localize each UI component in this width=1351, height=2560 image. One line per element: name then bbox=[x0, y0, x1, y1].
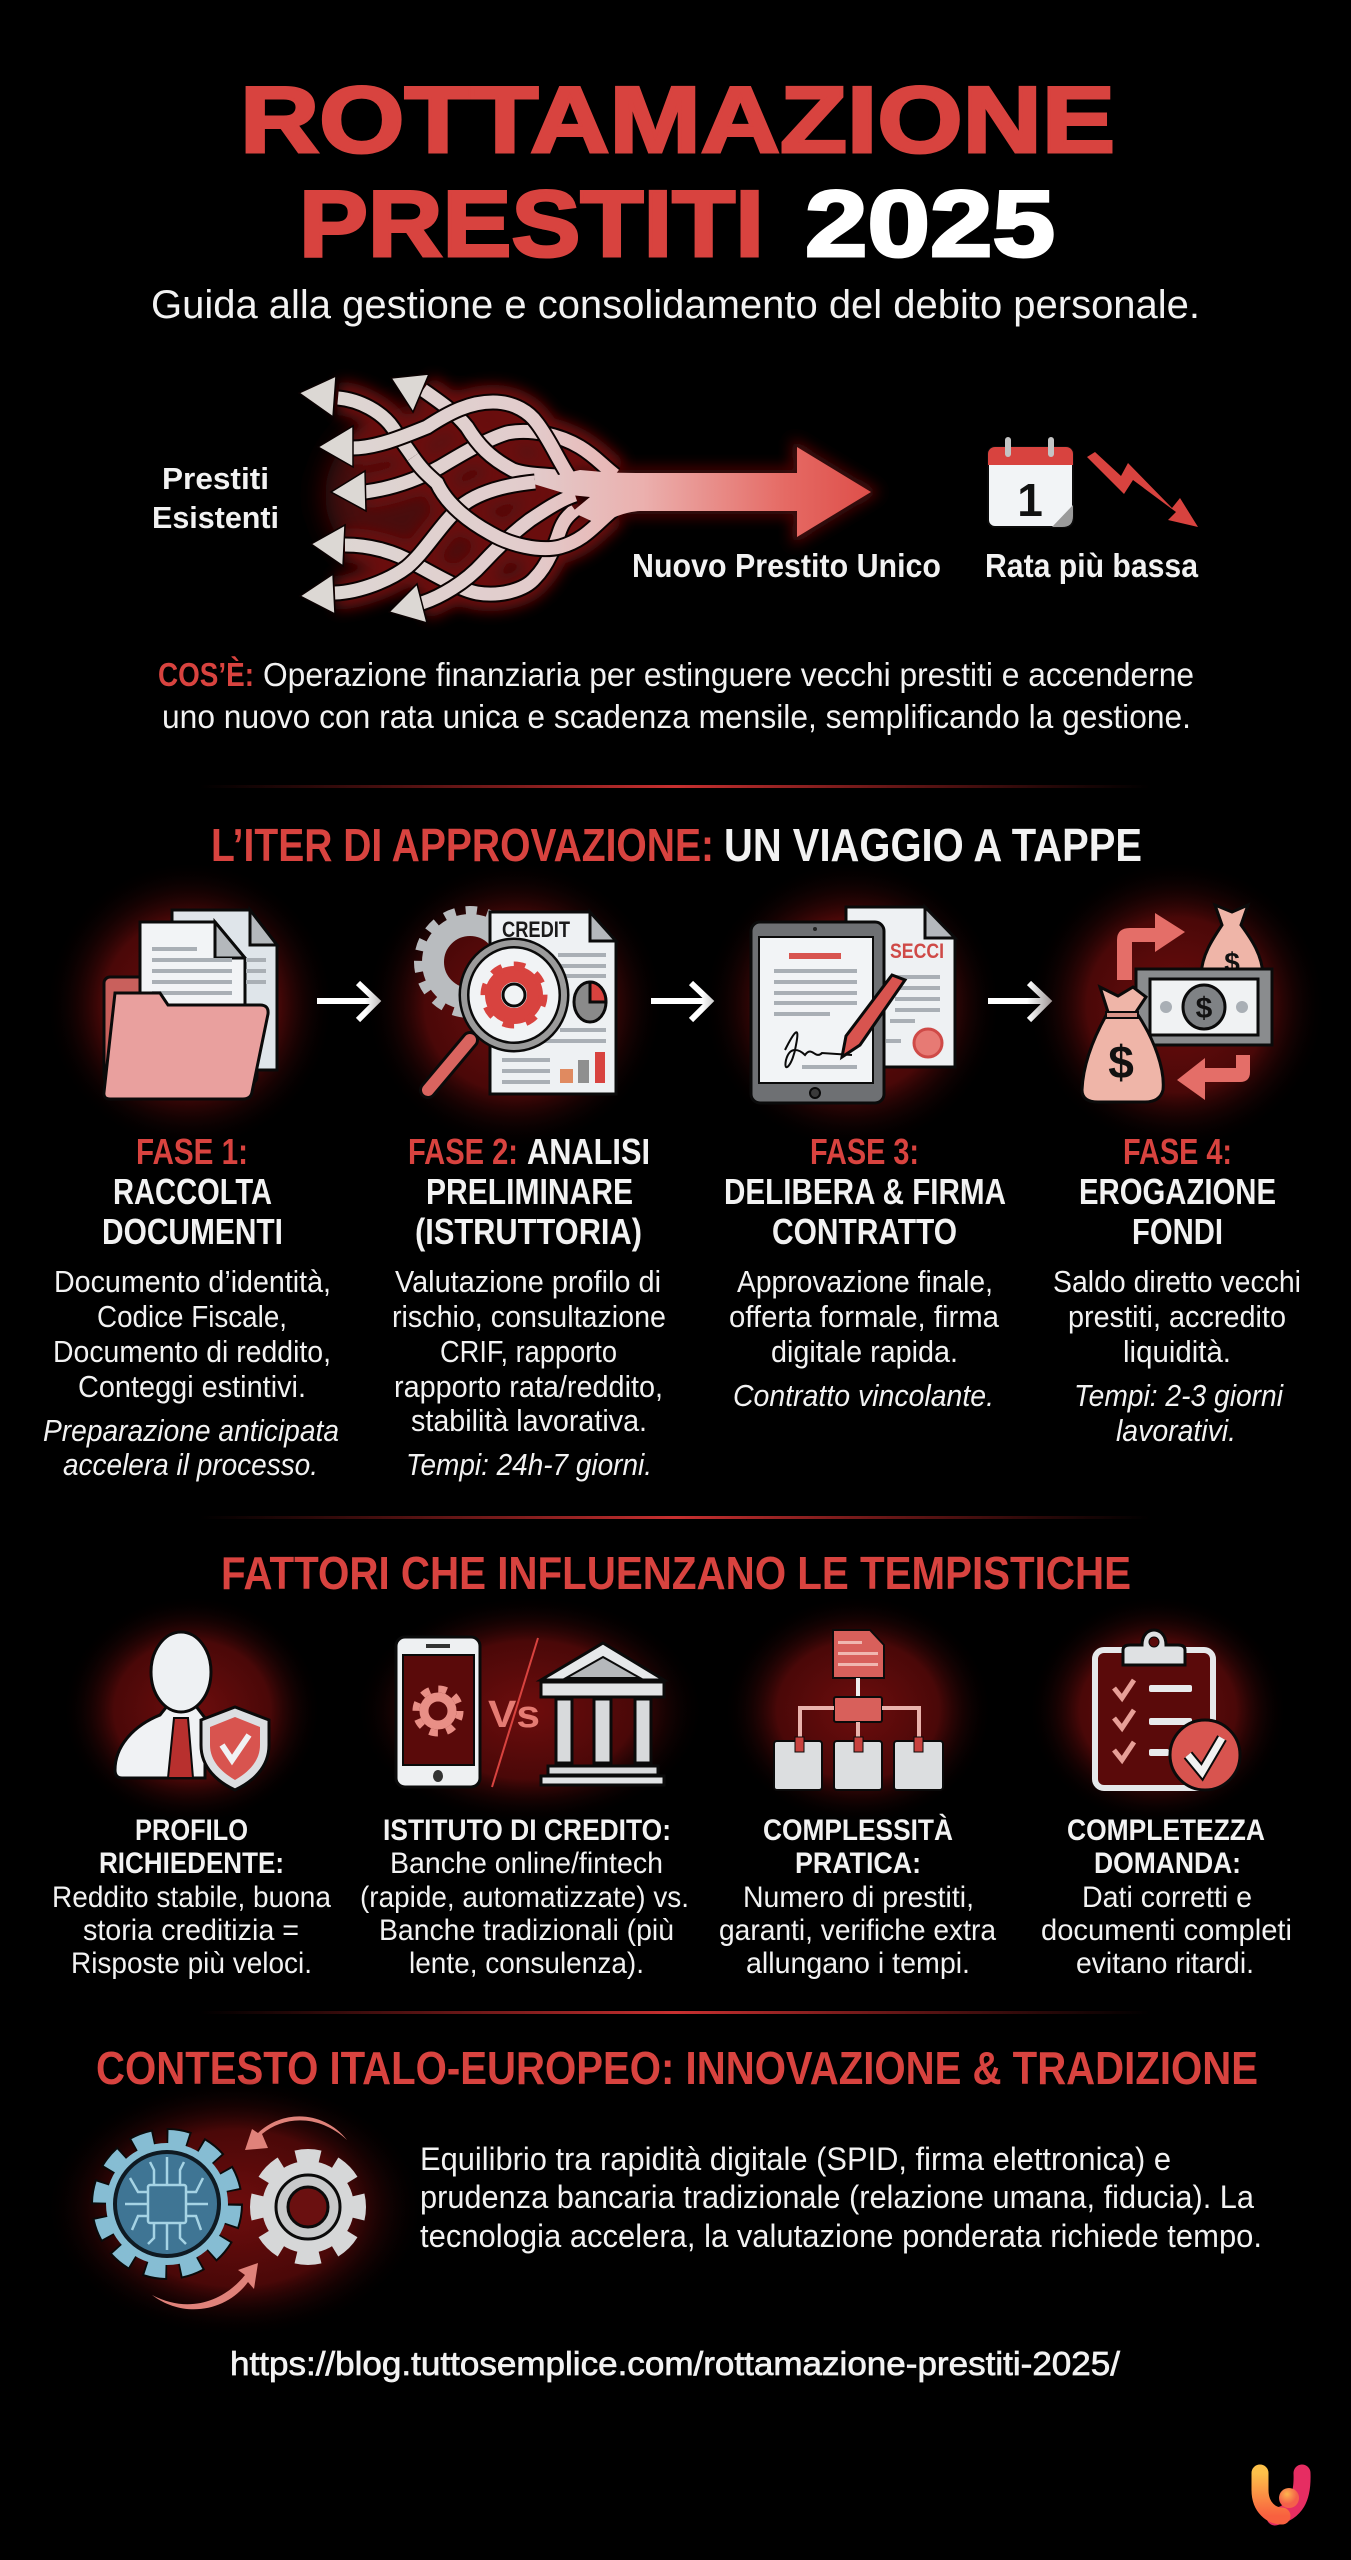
institution title: ISTITUTO DI CREDITO: bbox=[383, 1814, 671, 1847]
profile description: Risposte più veloci. bbox=[71, 1947, 312, 1980]
text block: context description: tecnologia accelera, la valutazione ponderata richiede tempo. bbox=[420, 2218, 1262, 2254]
phase 4 description: Saldo diretto vecchi bbox=[1053, 1264, 1301, 1299]
icon: calendar bbox=[988, 437, 1073, 527]
heading: approval process: L’ITER DI APPROVAZIONE: bbox=[211, 819, 714, 871]
icon: money bags and banknote: $ bbox=[1196, 992, 1213, 1025]
complexity title bbox=[763, 1813, 953, 1880]
text block: definition bbox=[158, 656, 1194, 735]
strand arrowheads bbox=[299, 374, 429, 623]
phase 3 description: offerta formale, firma bbox=[729, 1299, 1000, 1334]
completeness description: Dati corretti e bbox=[1082, 1881, 1252, 1914]
phase 1 title: DOCUMENTI bbox=[102, 1211, 283, 1252]
phase 1 description: Conteggi estintivi. bbox=[78, 1369, 306, 1404]
phase 2 title: FASE 2: bbox=[408, 1131, 518, 1172]
grey gear bbox=[258, 2157, 358, 2257]
phase 1 description: accelera il processo. bbox=[63, 1447, 318, 1482]
icon: digital and traditional gears bbox=[45, 2078, 425, 2338]
profile title: PROFILO bbox=[135, 1814, 248, 1847]
profile title: RICHIEDENTE: bbox=[99, 1847, 284, 1880]
icon: phone versus bank bbox=[355, 1595, 705, 1825]
icon: calendar: 1 bbox=[1017, 474, 1043, 526]
panel: phase 4 bbox=[1027, 860, 1327, 1448]
institution description: Banche tradizionali (più bbox=[379, 1914, 674, 1947]
completeness title: COMPLETEZZA bbox=[1067, 1814, 1265, 1847]
subtitle: Guida alla gestione e consolidamento del debito personale. bbox=[151, 283, 1200, 327]
panel: case complexity bbox=[719, 1595, 996, 1980]
text block: definition: Operazione finanziaria per estinguere vecchi prestiti e accenderne bbox=[263, 656, 1194, 693]
complexity description: allungano i tempi. bbox=[746, 1947, 970, 1980]
completeness title bbox=[1067, 1814, 1265, 1880]
completeness description: documenti completi bbox=[1041, 1914, 1292, 1947]
icon: credit analysis: CREDIT bbox=[502, 917, 570, 942]
icon: tangled loan strands bbox=[335, 390, 615, 603]
complexity description: Numero di prestiti, bbox=[743, 1881, 974, 1914]
complexity description: garanti, verifiche extra bbox=[719, 1914, 996, 1947]
icon: organisation chart bbox=[723, 1595, 993, 1825]
label: lower instalment: Rata più bassa bbox=[985, 547, 1199, 584]
phase 2 description: Valutazione profilo di bbox=[395, 1264, 661, 1299]
phase 2 description: Tempi: 24h-7 giorni. bbox=[406, 1447, 652, 1482]
phase 2 description: CRIF, rapporto bbox=[440, 1334, 617, 1369]
panel: credit institution bbox=[355, 1595, 705, 1980]
title: ROTTAMAZIONE bbox=[240, 67, 1115, 172]
text block: context description: Equilibrio tra rapidità digitale (SPID, firma elettronica) e bbox=[420, 2141, 1171, 2177]
arrow: phase 2 to 3 bbox=[651, 983, 710, 1020]
complexity description bbox=[719, 1881, 996, 1980]
phase 2 description: stabilità lavorativa. bbox=[411, 1403, 647, 1438]
panel: phase 1 bbox=[43, 860, 339, 1482]
icon: clipboard with check bbox=[1028, 1595, 1288, 1825]
phase 1 description: Documento di reddito, bbox=[53, 1334, 331, 1369]
complexity title: PRATICA: bbox=[795, 1847, 921, 1880]
phase 4 description: liquidità. bbox=[1123, 1334, 1231, 1369]
institution description: lente, consulenza). bbox=[409, 1947, 644, 1980]
label: existing loans: Esistenti bbox=[152, 500, 279, 535]
phase 1 title: RACCOLTA bbox=[113, 1171, 272, 1212]
phase 4 description bbox=[1053, 1264, 1301, 1448]
arrow: phase 3 to 4 bbox=[988, 983, 1048, 1020]
source URL: https://blog.tuttosemplice.com/rottamazione-prestiti-2025/ bbox=[230, 2345, 1121, 2382]
rotation arrows bbox=[152, 2116, 347, 2309]
icon: money bags and banknote: $ bbox=[1108, 1036, 1134, 1088]
panel: applicant profile bbox=[52, 1595, 331, 1980]
icon: tablet signature and SECCI document: SECCI bbox=[890, 940, 944, 963]
heading: approval process: UN VIAGGIO A TAPPE bbox=[724, 819, 1142, 871]
phase 2 description: rischio, consultazione bbox=[392, 1299, 666, 1334]
phase 4 title: FONDI bbox=[1132, 1211, 1223, 1252]
phase 4 description: lavorativi. bbox=[1116, 1413, 1236, 1448]
profile description: storia creditizia = bbox=[83, 1914, 299, 1947]
phase 3 title bbox=[724, 1131, 1006, 1252]
institution description: Banche online/fintech bbox=[390, 1847, 663, 1880]
phase 3 description bbox=[729, 1264, 1000, 1413]
arrow: phase 1 to 2 bbox=[317, 983, 377, 1020]
icon: credit analysis bbox=[365, 860, 665, 1150]
phase 1 description: Preparazione anticipata bbox=[43, 1413, 339, 1448]
label: new single loan: Nuovo Prestito Unico bbox=[632, 547, 941, 584]
title bbox=[240, 67, 1115, 276]
blue gear bbox=[101, 2138, 233, 2270]
phase 4 title: EROGAZIONE bbox=[1079, 1171, 1276, 1212]
phase 1 description: Codice Fiscale, bbox=[97, 1299, 287, 1334]
icon: phone versus bank: Vs bbox=[488, 1694, 540, 1736]
title: 2025 bbox=[805, 171, 1055, 276]
heading: timing factors: FATTORI CHE INFLUENZANO LE TEMPISTICHE bbox=[221, 1547, 1131, 1599]
institution description: (rapide, automatizzate) vs. bbox=[360, 1881, 689, 1914]
icon: tablet signature and SECCI document bbox=[702, 860, 1002, 1150]
title: PRESTITI bbox=[299, 171, 764, 276]
icon: person with shield bbox=[62, 1595, 322, 1825]
institution description bbox=[360, 1847, 689, 1980]
heading: approval process bbox=[211, 819, 1142, 871]
phase 4 description: Tempi: 2-3 giorni bbox=[1074, 1378, 1284, 1413]
icon: folder with documents bbox=[45, 860, 335, 1150]
icon: money bags and banknote: $ bbox=[1224, 947, 1240, 978]
phase 2 title: PRELIMINARE bbox=[426, 1171, 633, 1212]
diagram: debt consolidation flow bbox=[299, 374, 871, 623]
red glow behind strands bbox=[325, 390, 871, 603]
text block: definition: uno nuovo con rata unica e scadenza mensile, semplificando la gestione. bbox=[162, 698, 1191, 735]
phase 3 title: CONTRATTO bbox=[772, 1211, 957, 1252]
panel: application completeness bbox=[1028, 1595, 1292, 1980]
phase 2 title: (ISTRUTTORIA) bbox=[415, 1211, 642, 1252]
panel: phase 3 bbox=[702, 860, 1006, 1413]
phase 4 description: prestiti, accredito bbox=[1068, 1299, 1286, 1334]
label: existing loans: Prestiti bbox=[162, 461, 269, 496]
phase 3 description: Approvazione finale, bbox=[737, 1264, 993, 1299]
phase 4 title: FASE 4: bbox=[1123, 1131, 1232, 1172]
text block: context description bbox=[420, 2141, 1262, 2254]
completeness title: DOMANDA: bbox=[1094, 1847, 1241, 1880]
main red arrow bbox=[527, 447, 871, 537]
icon: logo bbox=[1260, 2473, 1302, 2517]
phase 2 description bbox=[392, 1264, 666, 1482]
phase 1 description: Documento d’identità, bbox=[54, 1264, 331, 1299]
phase 3 description: Contratto vincolante. bbox=[733, 1378, 994, 1413]
phase 1 title bbox=[102, 1131, 283, 1252]
profile description: Reddito stabile, buona bbox=[52, 1881, 331, 1914]
phase 3 title: DELIBERA & FIRMA bbox=[724, 1171, 1006, 1212]
phase 1 description bbox=[43, 1264, 339, 1482]
phase 2 title: ANALISI bbox=[527, 1131, 650, 1172]
text block: definition: COS’È: bbox=[158, 656, 254, 693]
phase 4 title bbox=[1079, 1131, 1276, 1252]
text block: context description: prudenza bancaria tradizionale (relazione umana, fiducia). La bbox=[420, 2179, 1254, 2215]
profile title bbox=[99, 1814, 284, 1880]
phase 3 description: digitale rapida. bbox=[771, 1334, 958, 1369]
completeness description bbox=[1041, 1881, 1292, 1980]
complexity title: COMPLESSITÀ bbox=[763, 1813, 953, 1847]
phase 1 title: FASE 1: bbox=[136, 1131, 248, 1172]
profile description bbox=[52, 1881, 331, 1980]
icon: falling red zigzag arrow bbox=[1087, 452, 1198, 527]
panel: phase 2 bbox=[365, 860, 666, 1482]
phase 3 title: FASE 3: bbox=[810, 1131, 919, 1172]
label: existing loans bbox=[152, 461, 279, 535]
completeness description: evitano ritardi. bbox=[1076, 1947, 1254, 1980]
icon: money bags and banknote bbox=[1027, 860, 1327, 1150]
phase 2 title bbox=[408, 1131, 650, 1252]
phase 2 description: rapporto rata/reddito, bbox=[394, 1369, 663, 1404]
